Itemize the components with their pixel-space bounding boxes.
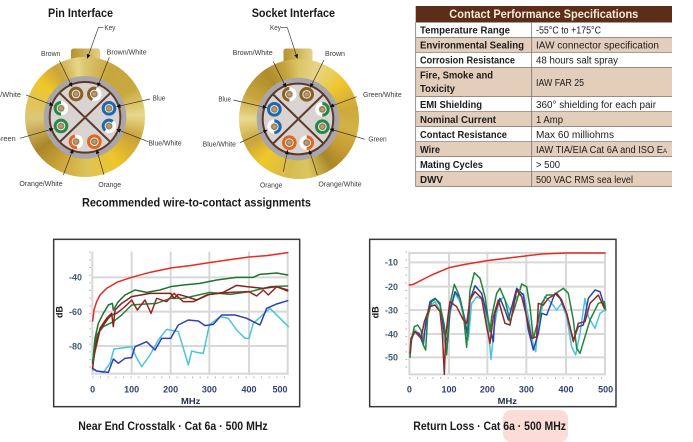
caption: wire-to-contact assignments: Recommended wire-to-contact assignments <box>82 196 311 210</box>
contact: green <box>54 119 68 133</box>
contact: brown/white <box>87 87 104 103</box>
label: orange: Orange <box>260 181 282 190</box>
label: key: Key <box>270 23 281 32</box>
y axis labels: -40 <box>385 329 398 339</box>
gold shell: socket <box>239 59 359 179</box>
row: wire: IAW TIA/EIA Cat 6A and ISO EA <box>536 145 668 156</box>
insert ring: socket <box>257 78 339 160</box>
row: corrosion resistance: 48 hours salt spray <box>536 56 618 66</box>
x axis labels: 100 <box>441 384 456 394</box>
contact: green <box>315 119 330 134</box>
contact: orange/white <box>299 135 314 150</box>
row: nominal current: Nominal Current <box>420 115 497 126</box>
diagram: pin interface connector <box>0 23 182 189</box>
x axis labels <box>407 384 613 394</box>
diagram: socket interface connector <box>203 23 402 190</box>
row: fire, smoke and toxicity: Fire, Smoke and <box>420 70 493 82</box>
leader lines: pin <box>20 28 150 175</box>
contact: orange <box>282 135 297 150</box>
axis title: db: dB <box>54 306 64 318</box>
row: dwv: DWV <box>420 175 443 186</box>
contact: green/white <box>315 102 330 117</box>
x axis labels: 100 <box>124 384 139 394</box>
axis title: mhz: MHz <box>498 396 518 406</box>
row: mating cycles: Mating Cycles <box>420 160 483 171</box>
row: mating cycles <box>420 160 560 171</box>
row: dwv <box>420 175 633 186</box>
row: environmental sealing: IAW connector specification <box>536 40 659 52</box>
label: blue/white: Blue/White <box>148 139 182 148</box>
label: blue: Blue <box>153 94 165 103</box>
row: mating cycles: > 500 <box>536 160 560 171</box>
contact: orange <box>87 134 102 149</box>
x axis labels: 0 <box>407 384 412 394</box>
label: green/white: Green/White <box>363 90 402 99</box>
insert ring: pin <box>44 76 126 159</box>
row: corrosion resistance: Corrosion Resistance <box>420 56 515 66</box>
contact: green/white <box>54 101 68 116</box>
caption: near end crosstalk: Near End Crosstalk · Cat 6a · 500 MHz <box>78 419 268 433</box>
heading: pin interface: Pin Interface <box>48 6 113 20</box>
axis title: db: dB <box>370 306 380 318</box>
contact: brown <box>299 87 314 102</box>
x axis labels <box>90 384 287 394</box>
table: contact performance specifications <box>416 6 672 187</box>
contact: blue <box>267 102 282 117</box>
axis title: mhz: MHz <box>181 396 201 406</box>
table row shading <box>416 37 672 187</box>
row: emi shielding: 360° shielding for each pair <box>536 100 657 111</box>
row: nominal current <box>420 115 563 126</box>
row: corrosion resistance <box>420 56 618 66</box>
row: temperature range: -55°C to +175°C <box>536 26 601 36</box>
heading: socket interface: Socket Interface <box>252 6 335 20</box>
chart: return loss <box>370 239 616 407</box>
y axis labels: -40 <box>69 273 82 283</box>
y axis labels: -10 <box>385 258 398 268</box>
row: emi shielding <box>420 100 657 111</box>
label: orange/white: Orange/White <box>19 179 63 188</box>
label: brown: Brown <box>41 49 60 58</box>
caption: return loss: Return Loss · Cat 6a · 500 MHz <box>413 419 566 433</box>
x axis labels: 500 <box>598 384 613 394</box>
y axis labels <box>385 258 398 363</box>
label: brown/white: Brown/White <box>233 48 273 57</box>
row: environmental sealing: Environmental Sealing <box>420 40 524 52</box>
gold shell: pin <box>25 57 145 177</box>
y axis labels: -60 <box>69 307 82 317</box>
contact: blue/white <box>102 119 119 136</box>
x axis labels: 400 <box>558 384 573 394</box>
contact: blue <box>102 101 116 116</box>
y axis labels: -50 <box>385 353 398 363</box>
label: blue/white: Blue/White <box>203 139 236 148</box>
x axis labels: 300 <box>519 384 534 394</box>
curves <box>409 253 606 374</box>
leader lines: socket <box>233 28 365 175</box>
table header <box>416 6 672 22</box>
label: key: Key <box>104 23 116 32</box>
label: brown: Brown <box>325 49 345 58</box>
chart: near end crosstalk <box>54 239 300 407</box>
row: nominal current: 1 Amp <box>536 115 563 126</box>
contact: brown <box>69 87 83 101</box>
label: brown/white: Brown/White <box>107 48 147 57</box>
x axis labels: 200 <box>480 384 495 394</box>
y axis labels: -20 <box>385 282 398 292</box>
row: temperature range: Temperature Range <box>420 26 510 36</box>
row: environmental sealing <box>420 40 659 52</box>
row: contact resistance <box>420 130 614 141</box>
label: blue: Blue <box>218 95 231 104</box>
row: contact resistance: Max 60 milliohms <box>536 130 614 141</box>
row: contact resistance: Contact Resistance <box>420 130 507 141</box>
row: fire, smoke and toxicity: Toxicity <box>420 84 455 95</box>
row: temperature range <box>420 26 601 36</box>
label: orange: Orange <box>98 180 121 189</box>
key tab: pin <box>71 48 100 70</box>
curves <box>93 253 288 372</box>
y axis labels: -80 <box>69 341 82 351</box>
row: wire: Wire <box>420 145 440 156</box>
label: green: Green <box>368 135 387 144</box>
highlight: pink patch <box>503 410 568 442</box>
row: fire, smoke and toxicity <box>420 70 584 95</box>
y axis labels <box>69 273 82 351</box>
contact: brown/white <box>282 87 297 102</box>
x axis labels: 500 <box>272 384 287 394</box>
contact: blue/white <box>267 119 282 134</box>
x axis labels: 300 <box>202 384 217 394</box>
row: wire <box>420 145 668 156</box>
x axis labels: 200 <box>163 384 178 394</box>
x axis labels: 0 <box>90 384 95 394</box>
table header: Contact Performance Specifications <box>449 7 639 21</box>
contact: orange/white <box>69 133 84 149</box>
key tab: socket <box>284 48 312 70</box>
row: fire, smoke and toxicity: IAW FAR 25 <box>536 78 584 89</box>
y axis labels: -30 <box>385 305 398 315</box>
label: orange/white: Orange/White <box>318 180 362 189</box>
x axis labels: 400 <box>241 384 256 394</box>
row: dwv: 500 VAC RMS sea level <box>536 175 633 186</box>
row: emi shielding: EMI Shielding <box>420 100 482 111</box>
